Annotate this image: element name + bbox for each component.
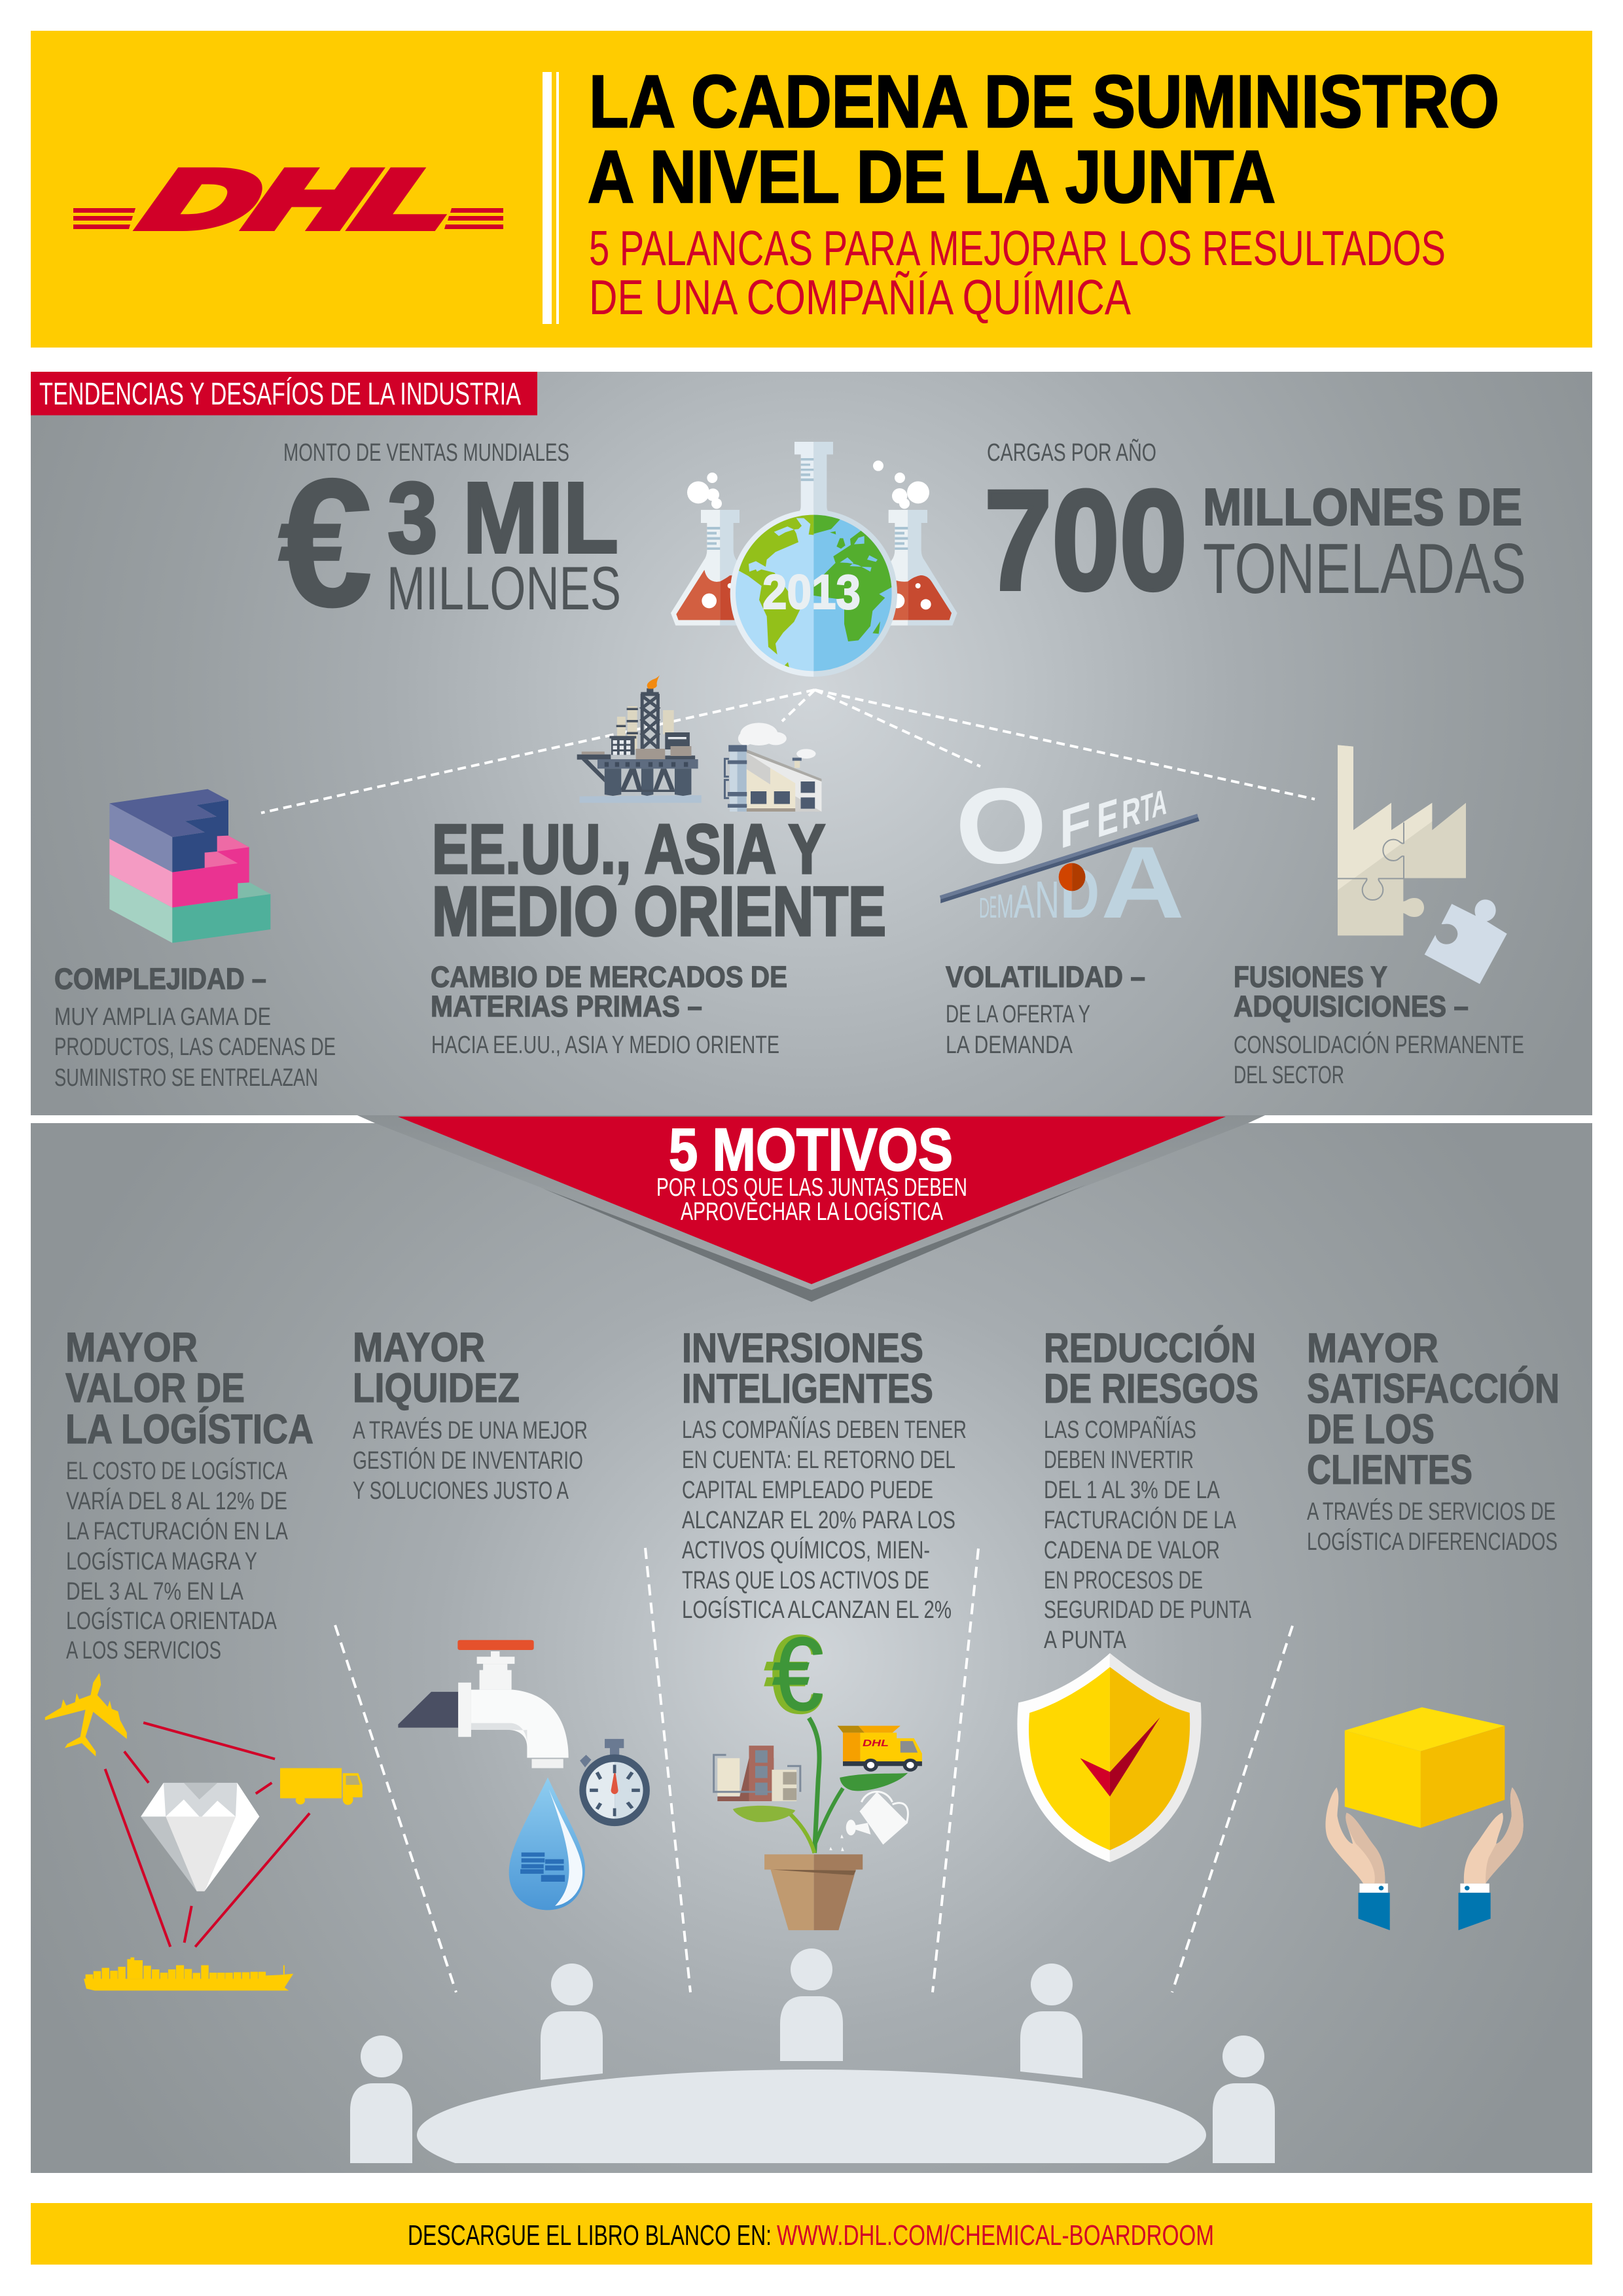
column 1: logistics value: VARÍA DEL 8 AL 12% DE bbox=[66, 1487, 287, 1515]
truck bbox=[280, 1768, 363, 1805]
watering can bbox=[829, 1791, 908, 1851]
callout: five reasons bbox=[398, 1117, 1226, 1284]
column 4: risk reduction: EN PROCESOS DE bbox=[1044, 1567, 1203, 1594]
column 2: liquidity: GESTIÓN DE INVENTARIO bbox=[353, 1446, 583, 1475]
stopwatch bbox=[579, 1739, 650, 1826]
stat: global sales: 3 MIL bbox=[387, 461, 618, 574]
column 3: smart investments: ACTIVOS QUÍMICOS, MIEN- bbox=[682, 1536, 930, 1564]
right flask bbox=[859, 461, 957, 626]
text: volatility: DE LA OFERTA Y bbox=[946, 1001, 1090, 1028]
icon: supply and demand: A bbox=[1101, 826, 1185, 940]
text: mergers: DEL SECTOR bbox=[1234, 1062, 1344, 1089]
column 4: risk reduction: A PUNTA bbox=[1044, 1626, 1127, 1654]
person 1 bbox=[350, 2036, 412, 2163]
section tag: TENDENCIAS Y DESAFÍOS DE LA INDUSTRIA bbox=[39, 377, 521, 412]
column 3: smart investments: CAPITAL EMPLEADO PUEDE bbox=[682, 1477, 933, 1504]
icon: supply and demand: O bbox=[952, 763, 1051, 889]
column 5: customer satisfaction bbox=[1307, 1325, 1560, 1556]
text: complexity bbox=[54, 962, 336, 1092]
column 4: risk reduction: CADENA DE VALOR bbox=[1044, 1537, 1220, 1564]
stat: tons per year bbox=[984, 439, 1526, 619]
column 2: liquidity: A TRAVÉS DE UNA MEJOR bbox=[353, 1416, 588, 1444]
DHL logo: DHL bbox=[134, 154, 469, 245]
dark chevron bbox=[543, 1185, 1086, 1302]
callout: five reasons: 5 MOTIVOS bbox=[669, 1117, 953, 1183]
stat: global sales: € bbox=[277, 441, 373, 645]
icon: supply and demand: D bbox=[979, 892, 990, 924]
icon: supply and demand: E bbox=[1097, 787, 1118, 848]
column 4: risk reduction: LAS COMPAÑÍAS bbox=[1044, 1416, 1196, 1444]
icon: supply and demand: D bbox=[1060, 853, 1099, 933]
footer banner: WWW.DHL.COM/CHEMICAL-BOARDROOM bbox=[777, 2219, 1214, 2251]
text: raw material markets: CAMBIO DE MERCADOS DE bbox=[431, 960, 787, 994]
column 5: customer satisfaction: SATISFACCIÓN bbox=[1307, 1366, 1560, 1412]
column 1: logistics value: LA LOGÍSTICA bbox=[65, 1407, 313, 1452]
column 1: logistics value: LOGÍSTICA MAGRA Y bbox=[66, 1547, 257, 1575]
column 4: risk reduction: DEL 1 AL 3% DE LA bbox=[1044, 1477, 1221, 1504]
icon: supply and demand: A bbox=[1014, 876, 1035, 928]
column 2: liquidity: Y SOLUCIONES JUSTO A bbox=[353, 1477, 569, 1505]
icon: supply and demand: N bbox=[1035, 870, 1060, 929]
text: mergers: ADQUISICIONES – bbox=[1234, 990, 1469, 1023]
icon: supply and demand: R bbox=[1122, 787, 1141, 838]
globe bbox=[730, 510, 899, 677]
column 3: smart investments: INVERSIONES bbox=[682, 1325, 923, 1371]
column 3: smart investments: ALCANZAR EL 20% PARA LOS bbox=[682, 1507, 955, 1534]
column 1: logistics value bbox=[65, 1325, 313, 1664]
subtitle bbox=[589, 221, 1446, 325]
header banner bbox=[31, 31, 1592, 348]
big heading: regions bbox=[432, 810, 886, 950]
icon: plant with euro: DHL bbox=[863, 1738, 889, 1749]
network lines bbox=[105, 1723, 310, 1946]
column 2: liquidity: MAYOR bbox=[353, 1325, 485, 1371]
big heading: regions: EE.UU., ASIA Y bbox=[432, 810, 825, 888]
flower pot bbox=[764, 1854, 863, 1930]
text: raw material markets: HACIA EE.UU., ASIA Y MEDIO ORIENTE bbox=[431, 1031, 779, 1059]
column 1: logistics value: A LOS SERVICIOS bbox=[66, 1637, 221, 1664]
person 4 bbox=[1020, 1964, 1082, 2079]
icon: supply and demand: A bbox=[1152, 781, 1167, 826]
column 3: smart investments: EN CUENTA: EL RETORNO DEL bbox=[682, 1446, 955, 1474]
icon: hands holding box bbox=[1325, 1707, 1524, 1930]
boardroom: table and people bbox=[350, 1948, 1275, 2163]
main title bbox=[588, 60, 1499, 218]
column 5: customer satisfaction: DE LOS bbox=[1307, 1407, 1435, 1452]
icon: oil rig bbox=[577, 675, 702, 803]
plane bbox=[45, 1673, 127, 1757]
stat: global sales bbox=[277, 439, 621, 645]
icon: container ship bbox=[84, 1958, 293, 1990]
icon: supply and demand: E bbox=[990, 889, 997, 924]
text: complexity: PRODUCTOS, LAS CADENAS DE bbox=[54, 1033, 336, 1061]
text: raw material markets: MATERIAS PRIMAS – bbox=[431, 990, 702, 1023]
column 1: logistics value: LOGÍSTICA ORIENTADA bbox=[66, 1607, 277, 1635]
text: complexity: COMPLEJIDAD – bbox=[54, 962, 266, 996]
footer banner bbox=[31, 2203, 1592, 2265]
stat: tons per year: 700 bbox=[984, 461, 1187, 619]
column 3: smart investments: TRAS QUE LOS ACTIVOS DE bbox=[682, 1567, 929, 1594]
column 4: risk reduction: DE RIESGOS bbox=[1044, 1366, 1258, 1412]
icon: factory bbox=[724, 723, 821, 812]
text: mergers bbox=[1234, 960, 1524, 1089]
icon: puzzle factory bbox=[1338, 745, 1507, 984]
column 2: liquidity bbox=[353, 1325, 588, 1505]
stat: tons per year: CARGAS POR AÑO bbox=[987, 439, 1156, 467]
icon: stacked blocks bbox=[109, 789, 270, 943]
column 4: risk reduction: FACTURACIÓN DE LA bbox=[1044, 1506, 1236, 1534]
table bbox=[417, 2070, 1206, 2163]
column 1: logistics value: MAYOR bbox=[65, 1325, 198, 1371]
icon: faucet and stopwatch bbox=[398, 1640, 650, 1910]
column 4: risk reduction bbox=[1044, 1325, 1258, 1654]
person 3 bbox=[780, 1948, 843, 2061]
dashed connectors from globe bbox=[261, 690, 1315, 813]
column 3: smart investments: LAS COMPAÑÍAS DEBEN TENER bbox=[682, 1416, 967, 1444]
text: volatility bbox=[946, 960, 1145, 1059]
water drop with coins bbox=[509, 1778, 585, 1910]
column 4: risk reduction: REDUCCIÓN bbox=[1044, 1325, 1256, 1371]
diamond bbox=[141, 1783, 259, 1892]
icon: flasks and globe bbox=[671, 442, 957, 677]
icon: plant with euro bbox=[714, 1613, 922, 1930]
panel: trends and challenges bbox=[31, 372, 1592, 1115]
footer banner: DESCARGUE EL LIBRO BLANCO EN: bbox=[408, 2219, 772, 2251]
column 3: smart investments: LOGÍSTICA ALCANZAN EL 2% bbox=[682, 1596, 952, 1624]
column 1: logistics value: DEL 3 AL 7% EN LA bbox=[66, 1578, 244, 1605]
column 2: liquidity: LIQUIDEZ bbox=[353, 1365, 520, 1411]
text: volatility: VOLATILIDAD – bbox=[946, 960, 1145, 994]
main title: LA CADENA DE SUMINISTRO bbox=[589, 60, 1499, 143]
euro: € bbox=[764, 1613, 823, 1736]
column 5: customer satisfaction: MAYOR bbox=[1307, 1325, 1438, 1371]
icon: supply and demand bbox=[940, 763, 1200, 940]
panel: five reasons bbox=[31, 1123, 1592, 2173]
callout: five reasons: APROVECHAR LA LOGÍSTICA bbox=[681, 1198, 943, 1226]
text: mergers: FUSIONES Y bbox=[1234, 960, 1387, 994]
delivery truck bbox=[838, 1726, 922, 1772]
icon: supply and demand: M bbox=[997, 888, 1014, 925]
stat: global sales: MILLONES bbox=[387, 554, 621, 622]
DHL logo bbox=[73, 154, 503, 245]
column 3: smart investments bbox=[682, 1325, 967, 1624]
text: complexity: MUY AMPLIA GAMA DE bbox=[54, 1003, 271, 1031]
centre flask neck bbox=[794, 442, 833, 515]
text: volatility: LA DEMANDA bbox=[946, 1031, 1073, 1059]
header divider bbox=[543, 72, 559, 324]
column 1: logistics value: VALOR DE bbox=[65, 1365, 245, 1411]
dashed connectors from the board bbox=[335, 1548, 1293, 1992]
globe year: 2013 bbox=[762, 565, 861, 619]
big heading: regions: MEDIO ORIENTE bbox=[432, 872, 886, 950]
icon: diamond logistics network bbox=[45, 1673, 363, 1946]
text: mergers: CONSOLIDACIÓN PERMANENTE bbox=[1234, 1031, 1524, 1059]
column 5: customer satisfaction: CLIENTES bbox=[1307, 1447, 1472, 1493]
section tag bbox=[31, 372, 537, 415]
stat: global sales: MONTO DE VENTAS MUNDIALES bbox=[283, 439, 569, 467]
icon: supply and demand: T bbox=[1141, 784, 1153, 831]
person 5 bbox=[1213, 2036, 1275, 2163]
person 2 bbox=[541, 1964, 603, 2080]
subtitle: DE UNA COMPAÑÍA QUÍMICA bbox=[589, 270, 1131, 325]
icon: supply and demand: F bbox=[1060, 791, 1091, 861]
grey wedge behind triangle bbox=[357, 1115, 1265, 1293]
callout: five reasons: POR LOS QUE LAS JUNTAS DEBEN bbox=[656, 1174, 967, 1202]
mini factory bbox=[714, 1746, 800, 1802]
column 1: logistics value: LA FACTURACIÓN EN LA bbox=[66, 1517, 288, 1545]
column 4: risk reduction: DEBEN INVERTIR bbox=[1044, 1446, 1194, 1474]
left flask bbox=[671, 473, 770, 626]
text: complexity: SUMINISTRO SE ENTRELAZAN bbox=[54, 1064, 318, 1092]
stat: tons per year: TONELADAS bbox=[1203, 529, 1526, 609]
main title: A NIVEL DE LA JUNTA bbox=[588, 135, 1275, 218]
column 3: smart investments: INTELIGENTES bbox=[682, 1366, 933, 1412]
text: raw material markets bbox=[431, 960, 787, 1059]
column 1: logistics value: EL COSTO DE LOGÍSTICA bbox=[66, 1457, 287, 1485]
stat: tons per year: MILLONES DE bbox=[1203, 478, 1522, 536]
column 4: risk reduction: SEGURIDAD DE PUNTA bbox=[1044, 1596, 1251, 1624]
icon: shield bbox=[1017, 1653, 1202, 1862]
euro: € bbox=[772, 1617, 823, 1732]
